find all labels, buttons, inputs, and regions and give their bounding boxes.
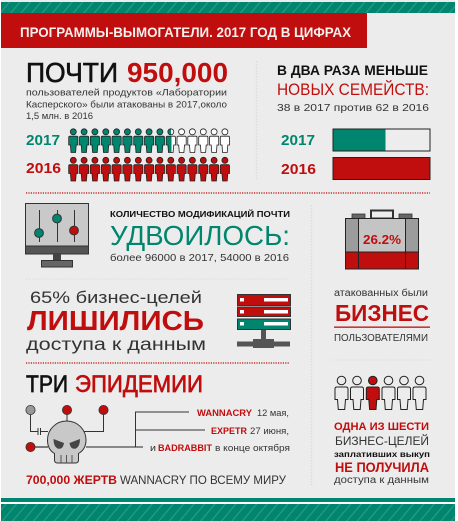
heading: three epidemics: ЭПИДЕМИИ	[75, 371, 203, 398]
panel: one of six did not get data	[334, 421, 430, 486]
label: WannaCry: WANNACRY	[197, 408, 253, 419]
text: users description: 1,5 млн. в 2016	[26, 111, 93, 122]
connector lines to epidemic labels	[86, 412, 205, 447]
label: ExPetr: EXPETR	[211, 426, 247, 437]
label: BadRabbit: BADRABBIT	[158, 443, 212, 454]
icon: skull with circuit	[26, 405, 108, 463]
icon: monitor with sliders	[26, 204, 88, 267]
label: WannaCry	[197, 408, 289, 419]
panel: 65% lost access	[26, 288, 206, 354]
list: three epidemics dates	[150, 408, 290, 454]
text: 700,000 victims: WANNACRY ПО ВСЕМУ МИРУ	[120, 475, 287, 487]
panel: 950,000 users	[26, 57, 230, 181]
text: 38 vs 62: 38 в 2017 против 62 в 2016	[277, 102, 429, 114]
top green stripe	[1, 2, 455, 13]
label: WannaCry: 12 мая,	[257, 408, 289, 419]
text: one of six: ОДНА ИЗ ШЕСТИ	[334, 421, 429, 433]
label: BadRabbit	[150, 443, 290, 454]
label: BadRabbit: и	[150, 443, 156, 454]
text: users: ПОЛЬЗОВАТЕЛЯМИ	[334, 333, 428, 344]
text: access to data: доступа к данным	[26, 334, 206, 354]
text: 96000 vs 54000: более 96000 в 2017, 54000 в 2016	[110, 252, 289, 264]
heading: doubled: УДВОИЛОСЬ:	[110, 220, 290, 251]
text: number of modifications: КОЛИЧЕСТВО МОДИФИКАЦИЙ ПОЧТИ	[110, 208, 290, 219]
heading: three epidemics: ТРИ	[26, 371, 68, 398]
text: business targets: БИЗНЕС-ЦЕЛЕЙ	[335, 435, 429, 448]
panel: business users	[334, 287, 430, 344]
bottom green band	[1, 498, 455, 521]
text: users description	[26, 88, 227, 122]
text: users description: Касперского» были атакованы в 2017,около	[26, 100, 227, 110]
text: of attacked were: атакованных были	[334, 287, 428, 299]
pictogram row: 2016: 2016	[26, 160, 61, 177]
icon: briefcase 26.2%	[345, 210, 419, 269]
icon: briefcase 26.2%: 26.2%	[363, 233, 401, 247]
bar chart: families: 2017	[281, 132, 315, 149]
text: 700,000 victims: 700,000 ЖЕРТВ	[26, 475, 117, 487]
text: 65% of business targets: 65% бизнес-целей	[30, 288, 202, 307]
subheading: new families: НОВЫХ СЕМЕЙСТВ:	[277, 80, 429, 99]
heading: business: БИЗНЕС	[335, 300, 429, 326]
text: 700,000 victims	[26, 475, 287, 487]
text: did not get: НЕ ПОЛУЧИЛА	[335, 460, 429, 475]
panel: modifications doubled	[110, 208, 290, 264]
title banner	[1, 13, 367, 48]
title banner: ПРОГРАММЫ-ВЫМОГАТЕЛИ. 2017 ГОД В ЦИФРАХ	[20, 24, 352, 40]
heading: almost 950,000	[26, 57, 228, 88]
text: paid ransom: заплативших выкуп	[334, 449, 430, 459]
pictogram row: 2017: 2017	[26, 132, 60, 149]
heading: three epidemics	[26, 371, 203, 398]
panel: new families	[277, 63, 430, 180]
bar chart: families: 2016	[281, 161, 316, 178]
heading: twice fewer: В ДВА РАЗА МЕНЬШЕ	[277, 63, 428, 78]
heading: almost 950,000: 950,000	[127, 57, 228, 88]
heading: almost 950,000: ПОЧТИ	[26, 57, 118, 88]
label: ExPetr	[211, 426, 289, 437]
pictogram: one of six	[335, 376, 426, 410]
text: users description: пользователей продуктов «Лаборатории	[26, 88, 227, 98]
pictogram row: 2016	[26, 157, 230, 181]
label: BadRabbit: в конце октября	[215, 443, 290, 454]
icon: server rack	[237, 294, 290, 348]
label: ExPetr: 27 июня,	[250, 426, 289, 437]
pictogram row: 2017	[26, 129, 230, 152]
bar chart: families	[281, 129, 430, 180]
text: access to data: доступа к данным	[334, 475, 429, 486]
heading: lost: ЛИШИЛИСЬ	[27, 305, 204, 336]
